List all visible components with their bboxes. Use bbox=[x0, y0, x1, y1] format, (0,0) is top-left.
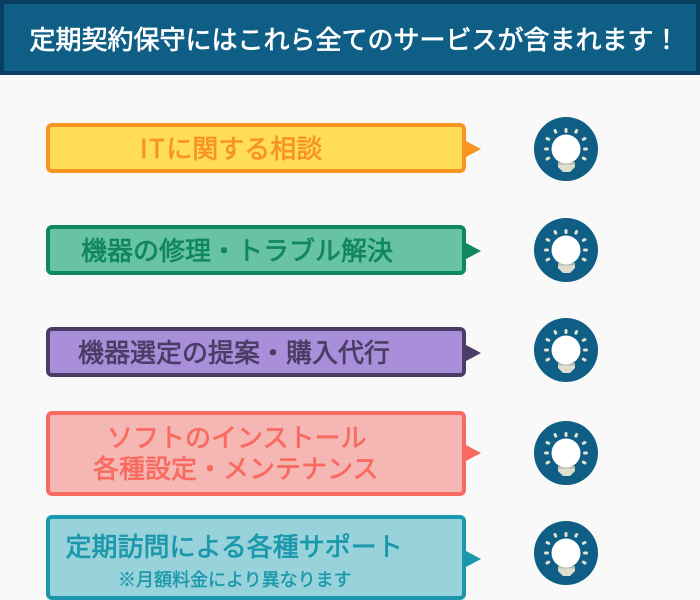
service box: installation and maintenance bbox=[46, 411, 466, 496]
title: 定期契約保守にはこれら全てのサービスが含まれます！ bbox=[30, 20, 680, 56]
icon: light bulb 3 bbox=[534, 318, 598, 382]
service box: scheduled visits bbox=[46, 515, 466, 600]
icon: light bulb 1 bbox=[534, 117, 598, 181]
icon: light bulb 2 bbox=[534, 218, 598, 282]
icon: light bulb 5 bbox=[534, 521, 598, 585]
icon: light bulb 4 bbox=[534, 421, 598, 485]
label line 2: 各種設定・メンテナンス bbox=[93, 449, 378, 486]
arrow: orange bbox=[466, 141, 481, 157]
label: 機器選定の提案・購入代行 bbox=[78, 333, 390, 370]
service box: IT consultation bbox=[46, 123, 466, 173]
service box: repair and troubleshooting bbox=[46, 225, 466, 275]
label: 機器の修理・トラブル解決 bbox=[81, 231, 393, 268]
note: ※月額料金により異なります bbox=[118, 566, 352, 592]
label line 1: ソフトのインストール bbox=[107, 418, 366, 455]
arrow: red bbox=[466, 445, 481, 461]
arrow: green bbox=[466, 243, 481, 259]
title banner bbox=[0, 0, 700, 75]
label: 定期訪問による各種サポート bbox=[66, 527, 403, 564]
arrow: teal bbox=[466, 551, 481, 567]
service box: equipment selection bbox=[46, 327, 466, 377]
arrow: purple bbox=[466, 345, 481, 361]
label: ITに関する相談 bbox=[140, 129, 322, 166]
